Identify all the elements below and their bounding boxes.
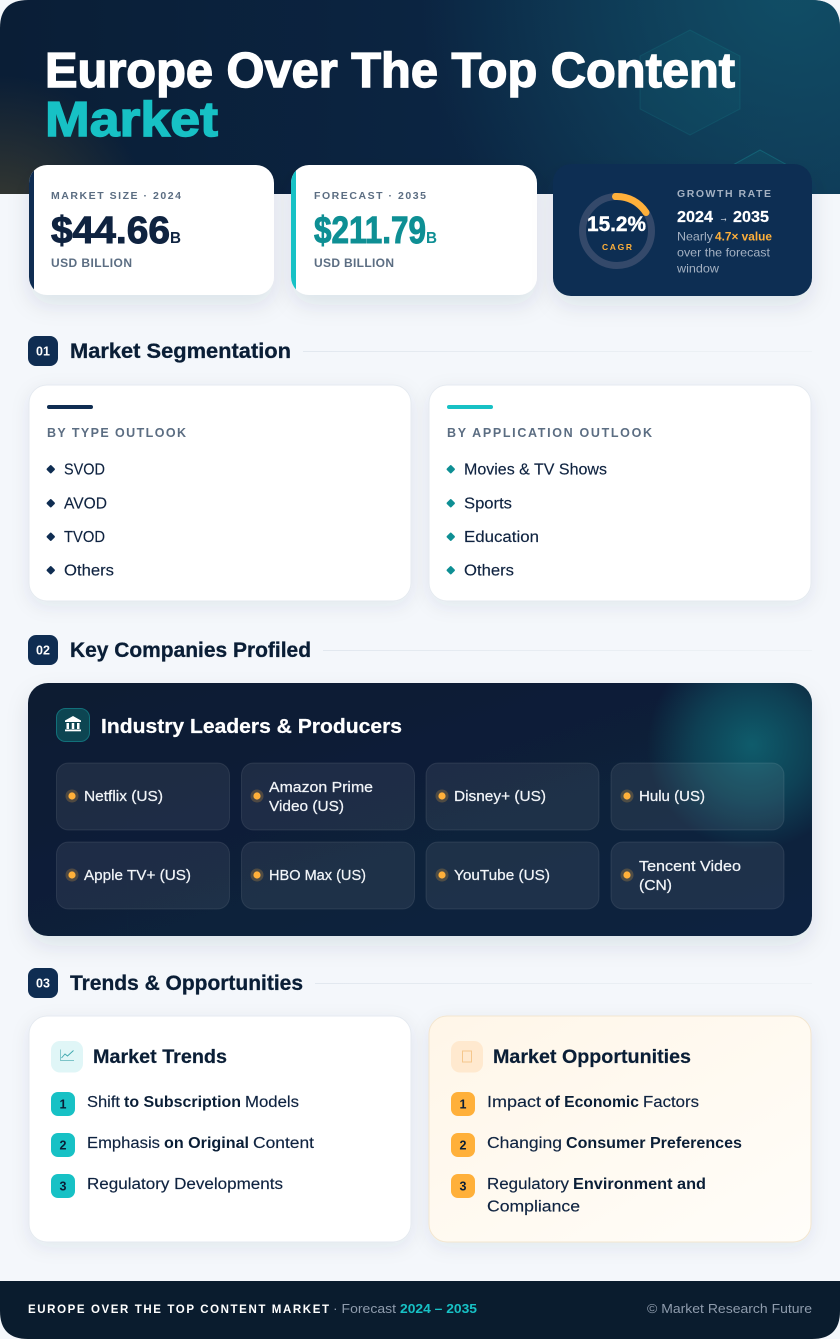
list item 1 xyxy=(51,1092,299,1116)
footer xyxy=(0,1281,840,1339)
chip: Hulu xyxy=(611,763,784,830)
header banner xyxy=(0,0,840,194)
list item 2 xyxy=(451,1133,742,1157)
list: application items: Education xyxy=(464,529,539,546)
chip: Amazon Prime Video xyxy=(242,763,414,830)
panel: key companies: Industry Leaders & Producers xyxy=(101,715,402,738)
list item 1: Models xyxy=(245,1094,299,1111)
footer: · Forecast xyxy=(333,1302,397,1316)
list item 2 xyxy=(51,1133,315,1157)
chip: Apple TV+: Apple TV+ (US) xyxy=(84,867,191,884)
section heading 03: Trends & Opportunities xyxy=(70,972,303,995)
list: type items: Others xyxy=(64,562,114,580)
stat card: market size: MARKET SIZE · 2024 xyxy=(51,190,181,202)
stat card: growth rate: Nearly xyxy=(677,230,713,244)
chip: Netflix xyxy=(56,763,230,830)
stat card: forecast xyxy=(291,165,537,295)
list item 1: 1 xyxy=(60,1098,67,1112)
list: application items: Movies & TV Shows xyxy=(464,462,607,478)
panel: by application outlook: BY APPLICATION OUTLOOK xyxy=(447,426,652,440)
list: application items xyxy=(446,462,607,580)
footer: 2024 – 2035 xyxy=(400,1302,477,1316)
stat card: growth rate: GROWTH RATE xyxy=(677,188,771,200)
footer: © Market Research Future xyxy=(647,1302,812,1316)
list item 1: to Subscription xyxy=(124,1094,241,1111)
chart: CAGR ring xyxy=(582,196,652,266)
panel: key companies xyxy=(28,683,812,936)
section heading 01: 01 xyxy=(36,344,50,358)
stat card: growth rate: → xyxy=(719,209,728,225)
list item 2: 2 xyxy=(60,1138,67,1152)
panel: by type outlook xyxy=(29,385,411,601)
chip: YouTube: YouTube (US) xyxy=(454,867,550,884)
icon: line chart xyxy=(51,1041,83,1072)
list: type items: TVOD xyxy=(64,529,105,546)
section heading 02: 02 xyxy=(36,644,50,658)
section heading 01 xyxy=(28,336,812,366)
chart: CAGR ring: CAGR xyxy=(602,242,632,252)
stat card: market size: $44.66 xyxy=(51,210,170,252)
stat card: forecast: $211.79 xyxy=(314,210,426,252)
chip: Disney+ xyxy=(426,763,599,830)
panel: market opportunities: Market Opportunities xyxy=(493,1047,691,1068)
section heading 02 xyxy=(28,635,812,665)
chip: HBO Max xyxy=(242,842,414,909)
chip: Tencent Video: Tencent Video xyxy=(639,858,741,875)
list item 2: 2 xyxy=(460,1138,467,1152)
list item 1: Factors xyxy=(643,1094,699,1111)
stat card: growth rate: window xyxy=(676,262,719,276)
list item 3: Compliance xyxy=(487,1198,580,1216)
list item 3: Regulatory xyxy=(487,1176,569,1193)
stat card: growth rate: 2024 xyxy=(677,209,713,226)
stat card: growth rate: 2035 xyxy=(733,209,769,226)
list item 1: 1 xyxy=(460,1098,467,1112)
title: Europe Over The Top Content xyxy=(45,44,735,98)
list item 1: Impact xyxy=(487,1094,542,1111)
chip: Netflix: Netflix (US) xyxy=(84,788,163,805)
list item 3: 3 xyxy=(460,1180,467,1194)
chip: Disney+: Disney+ (US) xyxy=(454,788,546,805)
list item 3 xyxy=(51,1174,283,1198)
icon: hexagon decoration small xyxy=(720,150,800,194)
list item 3: 3 xyxy=(60,1180,67,1194)
stat card: forecast: FORECAST · 2035 xyxy=(314,190,426,202)
stat card: growth rate: 4.7× value xyxy=(715,230,772,244)
chip: Apple TV+ xyxy=(56,842,230,909)
stat card: market size: B xyxy=(170,230,181,247)
list: type items: AVOD xyxy=(64,496,107,512)
title: Market xyxy=(45,93,218,147)
panel: by application outlook xyxy=(429,385,811,601)
list item 1 xyxy=(451,1092,699,1116)
icon: hexagon decoration large xyxy=(640,30,740,135)
chip: Amazon Prime Video: Video (US) xyxy=(269,798,344,815)
list: application items: Sports xyxy=(464,496,512,512)
chip: YouTube xyxy=(426,842,599,909)
panel: market opportunities xyxy=(429,1016,811,1242)
chip: Tencent Video xyxy=(611,842,784,909)
section heading 01: Market Segmentation xyxy=(70,340,291,363)
list: type items: SVOD xyxy=(64,462,105,478)
list item 1: of Economic xyxy=(545,1094,639,1111)
section heading 03: 03 xyxy=(36,976,50,990)
stat card: growth rate: over the forecast xyxy=(677,246,771,260)
stat card: market size: USD BILLION xyxy=(51,256,132,270)
list item 3: Regulatory Developments xyxy=(87,1176,283,1193)
panel: by type outlook: BY TYPE OUTLOOK xyxy=(47,426,186,440)
section heading 03 xyxy=(28,968,812,998)
list item 2: Content xyxy=(253,1135,315,1152)
list item 1: Shift xyxy=(87,1094,121,1111)
footer: EUROPE OVER THE TOP CONTENT MARKET xyxy=(28,1304,329,1316)
stat card: market size xyxy=(29,165,274,295)
title xyxy=(45,44,735,147)
list item 2: Consumer Preferences xyxy=(566,1135,742,1152)
list item 2: on Original xyxy=(164,1135,249,1152)
list item 3 xyxy=(451,1174,706,1216)
list: type items xyxy=(46,462,114,580)
chip: Hulu: Hulu (US) xyxy=(639,788,705,805)
chip: Tencent Video: (CN) xyxy=(639,877,672,894)
list: application items: Others xyxy=(464,562,514,580)
icon: institution xyxy=(56,708,90,742)
list item 3: Environment and xyxy=(573,1176,706,1193)
chip: HBO Max: HBO Max (US) xyxy=(269,867,366,884)
panel: market trends xyxy=(29,1016,411,1242)
section heading 02: Key Companies Profiled xyxy=(70,639,311,662)
chip: Amazon Prime Video: Amazon Prime xyxy=(269,779,373,796)
stat card: forecast: B xyxy=(426,230,437,247)
stat card: growth rate xyxy=(553,164,812,296)
list item 2: Changing xyxy=(487,1135,562,1152)
chart: CAGR ring: 15.2% xyxy=(587,213,646,236)
panel: market trends: Market Trends xyxy=(93,1047,227,1068)
list item 2: Emphasis xyxy=(87,1135,160,1152)
stat card: forecast: USD BILLION xyxy=(314,256,394,270)
icon: missing glyph box xyxy=(451,1041,483,1072)
